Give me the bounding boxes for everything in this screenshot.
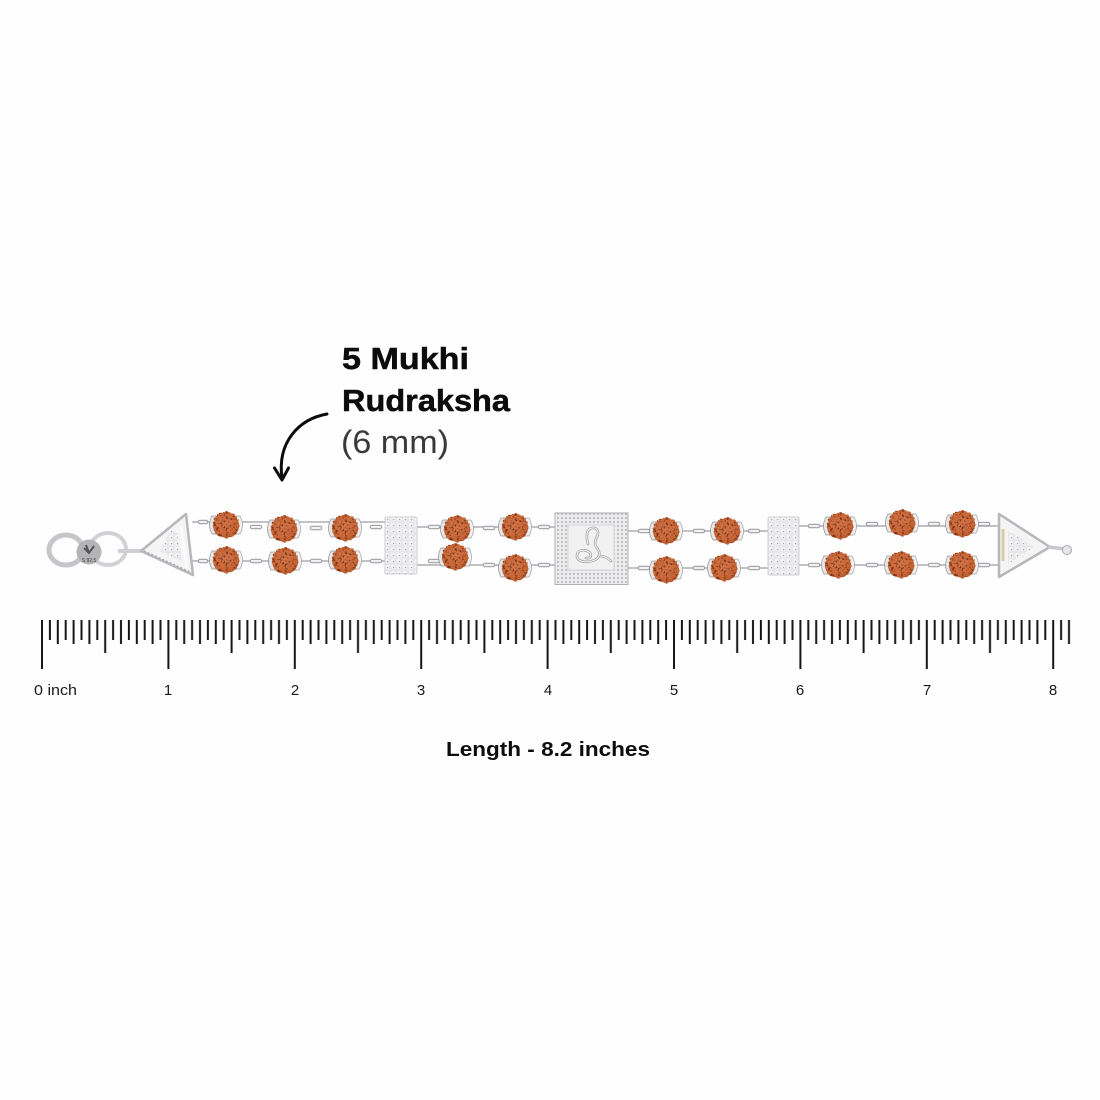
clasp ring [90, 533, 126, 565]
ruler labels: 4 [544, 682, 552, 699]
right studded block [768, 517, 799, 575]
ruler labels: 7 [923, 682, 931, 699]
center pendant with snake [555, 513, 628, 584]
right triangle connector with hook [999, 514, 1072, 577]
ruler tick marks [41, 620, 1071, 669]
clasp: rings and hallmark tag [49, 533, 144, 565]
bottom row rudraksha beads [210, 544, 978, 583]
left studded block [385, 517, 417, 574]
snake emblem [577, 528, 611, 562]
ruler labels: 3 [417, 682, 425, 699]
callout title line 2: Rudraksha [342, 383, 511, 418]
hallmark tag [76, 540, 102, 564]
ruler labels: 1 [164, 682, 172, 699]
clasp ring [49, 535, 83, 565]
ruler labels: 6 [796, 682, 804, 699]
callout title line 1: 5 Mukhi [342, 341, 469, 376]
ruler labels: 2 [291, 682, 299, 699]
callout: 5 Mukhi Rudraksha (6 mm) [341, 341, 511, 460]
callout size: (6 mm) [341, 424, 449, 460]
left triangle connector [141, 514, 193, 575]
ruler labels: 5 [670, 682, 678, 699]
arrow: curved pointer to bead [274, 414, 327, 480]
length caption: Length - 8.2 inches [446, 739, 650, 761]
chain links [193, 522, 998, 568]
top row rudraksha beads [210, 510, 978, 544]
ruler labels [34, 682, 1057, 699]
bracelet [49, 510, 1072, 584]
center panel [568, 525, 614, 570]
ruler [34, 620, 1071, 699]
ruler labels: 0 inch [34, 682, 77, 699]
ruler labels: 8 [1049, 682, 1057, 699]
clasp: rings and hallmark tag: S 92.5 [82, 558, 96, 564]
